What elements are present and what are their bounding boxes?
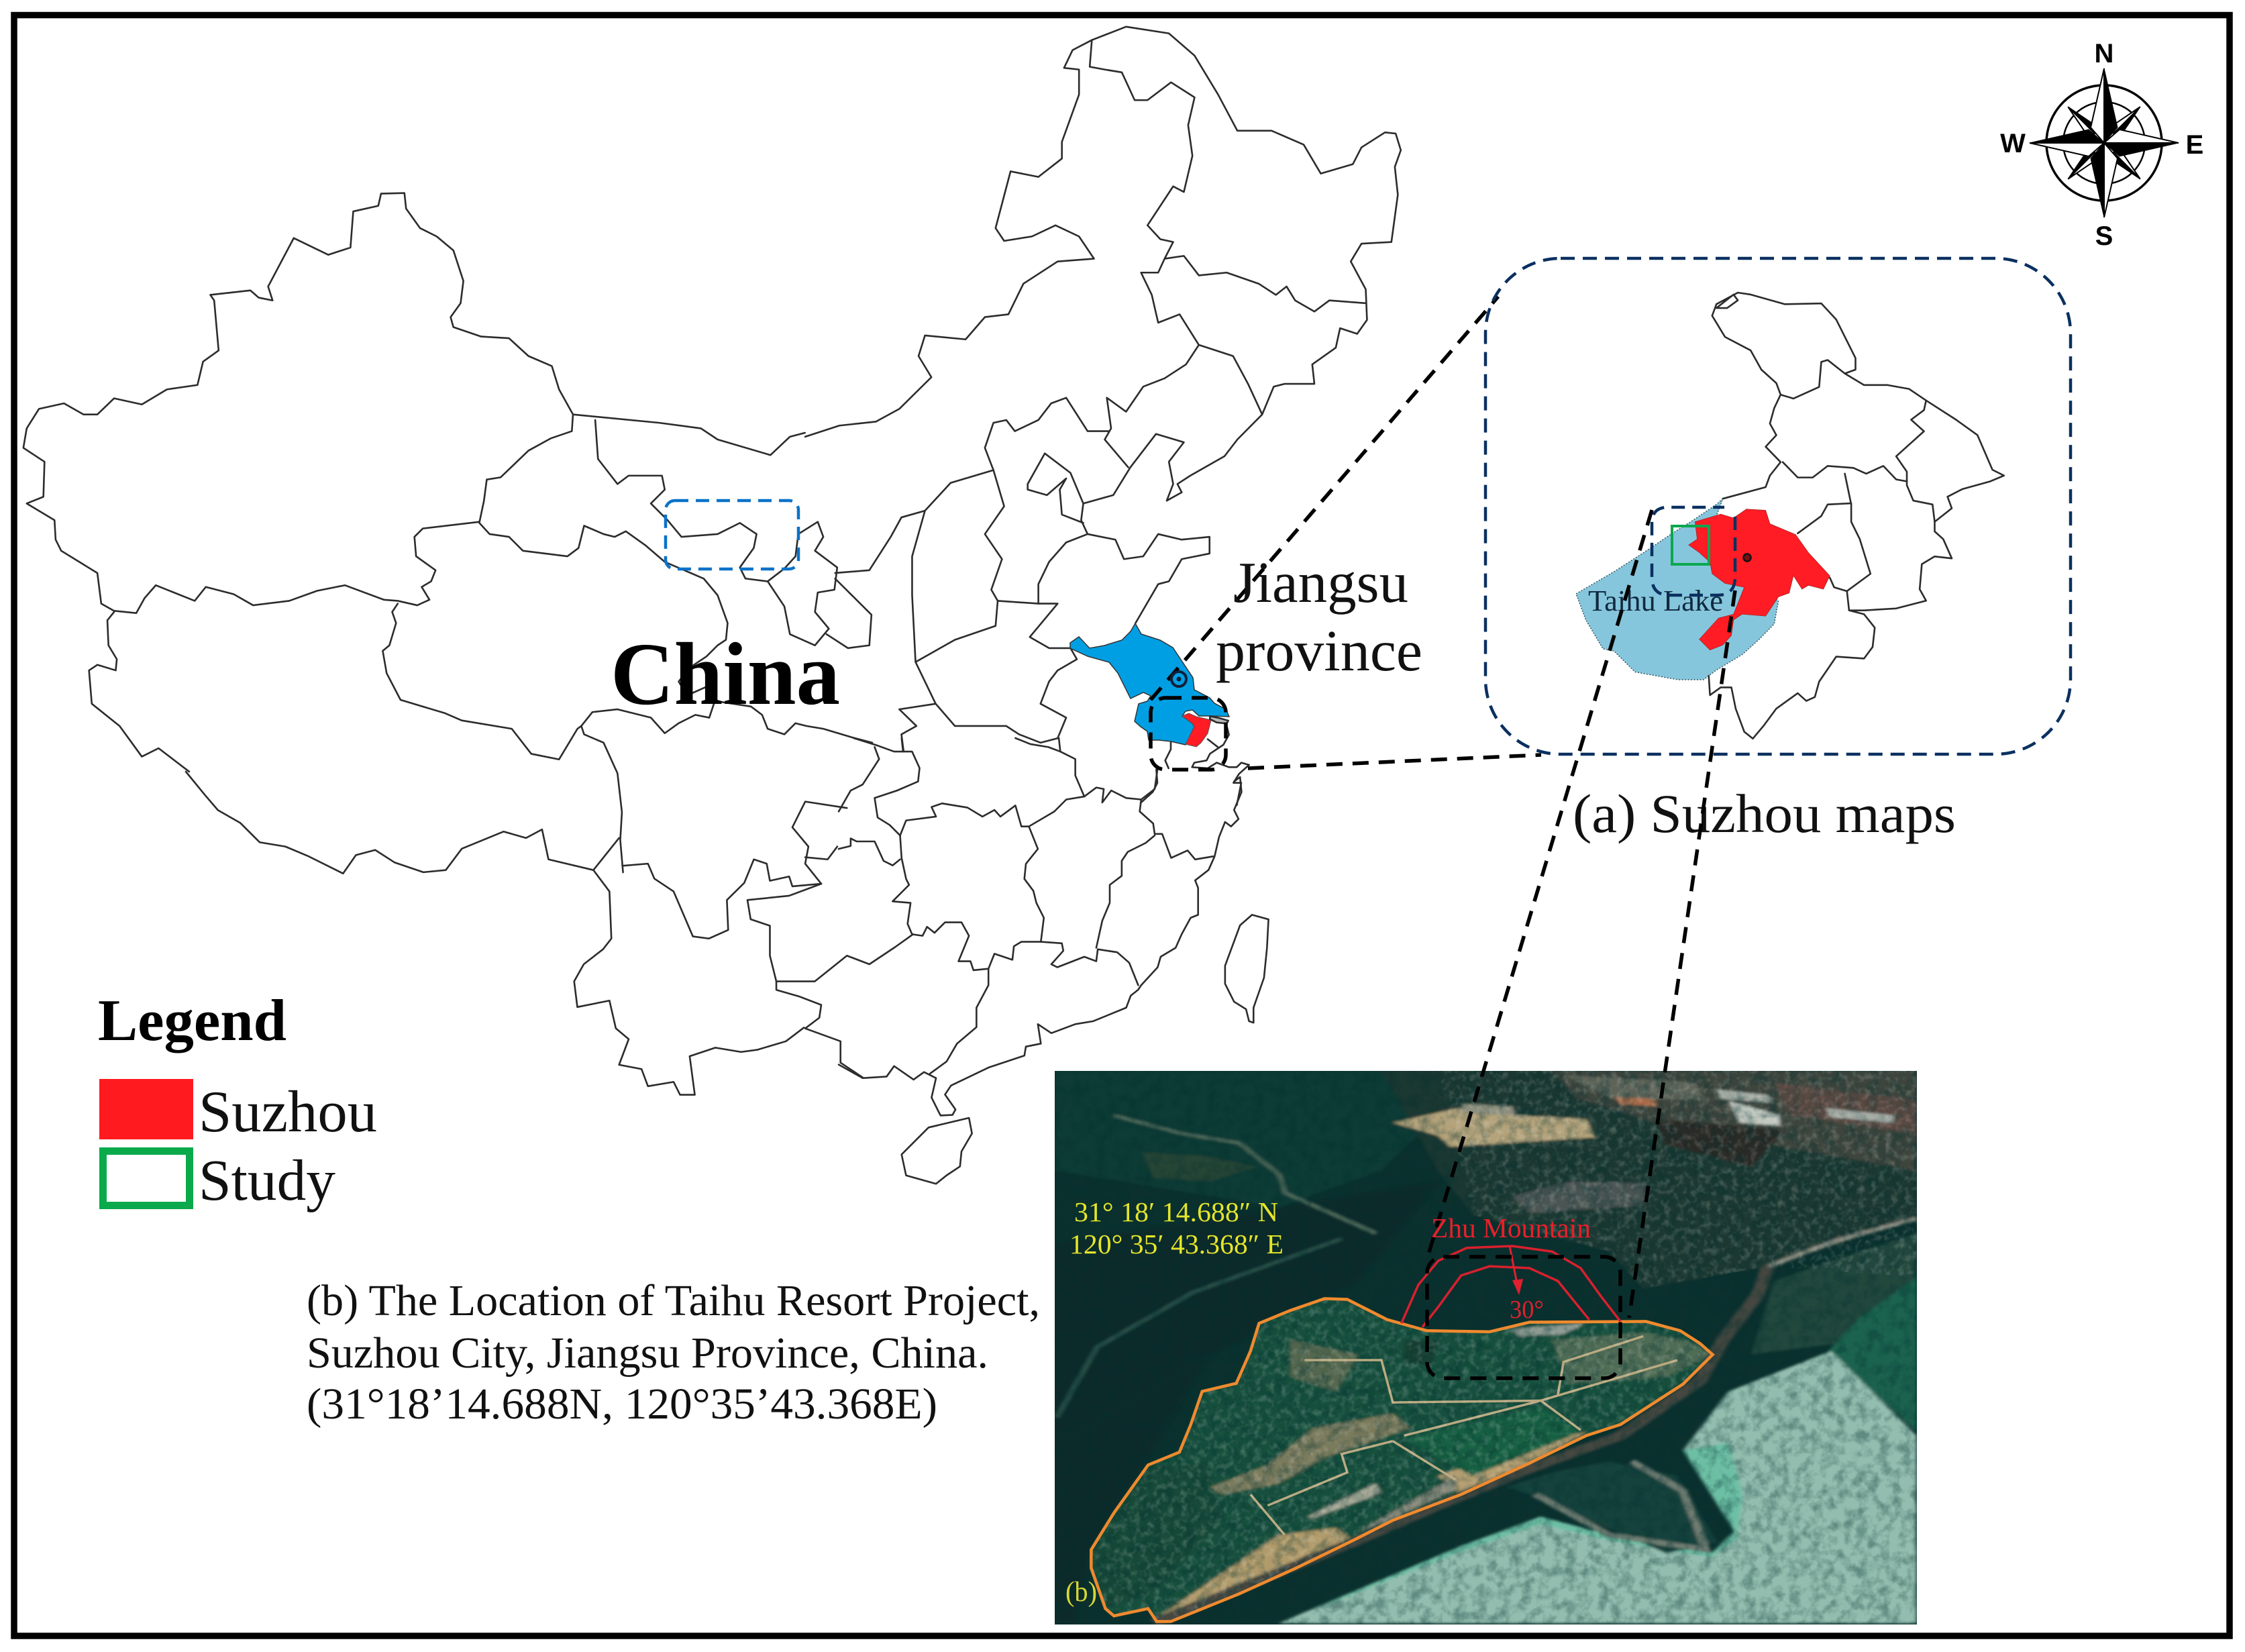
caption: (b) location of project: (31°18’14.688N, 120°35’43.368E)	[307, 1380, 937, 1429]
compass letters: W	[2000, 129, 2026, 158]
map label: Jiangsu province	[1216, 550, 1422, 683]
Jiangsu city outlines	[1709, 293, 2004, 739]
Jiangsu south border and Shanghai details	[1141, 716, 1249, 805]
compass letters: N	[2095, 39, 2113, 68]
legend label: Suzhou: Suzhou	[199, 1080, 377, 1145]
marker: Suzhou centre	[1743, 554, 1751, 561]
map label: Jiangsu province: Jiangsu	[1233, 550, 1408, 615]
legend	[98, 988, 377, 1212]
caption: (b) location of project	[307, 1276, 1040, 1429]
caption: (b) location of project: (b) The Location of Taihu Resort Project,	[307, 1276, 1040, 1325]
Suzhou highlighted in red on the China map	[1182, 713, 1211, 747]
compass letters: S	[2095, 221, 2113, 251]
inset: Suzhou maps	[1485, 258, 2071, 754]
Taihu Lake water area	[1576, 499, 1779, 680]
orange site boundary	[1091, 1298, 1713, 1621]
satellite coordinates label: 120° 35′ 43.368″ E	[1069, 1229, 1284, 1259]
map of China provinces	[23, 27, 1401, 1184]
satellite coordinates label	[1069, 1196, 1284, 1259]
slope arrow	[1510, 1246, 1523, 1295]
compass dial and star	[2030, 68, 2179, 217]
satellite base imagery painted with blurred shapes	[1054, 1070, 1916, 1623]
mottled dark texture	[1055, 1071, 1917, 1624]
map label: Jiangsu province: province	[1216, 618, 1422, 683]
compass letters	[2000, 39, 2203, 251]
satellite image panel	[1054, 1070, 1917, 1624]
long dashed leader lines from inset to satellite image	[1427, 510, 1735, 1318]
compass letters: E	[2186, 130, 2203, 160]
blue dashed box on map	[666, 501, 798, 569]
study site green square	[1672, 526, 1709, 564]
Zhu Mountain label: Zhu Mountain	[1431, 1212, 1591, 1243]
dashed leader lines from Jiangsu to inset	[1151, 297, 1541, 768]
navy rounded dashed inset frame	[1485, 258, 2071, 754]
map label: China: China	[611, 624, 840, 723]
satellite coordinates label: 31° 18′ 14.688″ N	[1074, 1196, 1278, 1227]
legend title: Legend	[98, 988, 286, 1053]
marker: Nanjing location	[1171, 672, 1186, 686]
dashed box around south Jiangsu	[1151, 698, 1226, 770]
satellite panel label (b): (b)	[1065, 1577, 1097, 1608]
Suzhou city in red	[1689, 509, 1830, 650]
legend label: Study: Study	[199, 1147, 335, 1212]
Taihu Lake label: Taihu Lake	[1588, 584, 1723, 617]
light speckle on land and town	[1055, 1071, 1917, 1624]
caption: (a) Suzhou maps: (a) Suzhou maps	[1573, 783, 1956, 844]
slope angle label: 30°	[1510, 1296, 1544, 1324]
legend swatch: Study	[103, 1151, 189, 1205]
Jiangsu province highlighted in blue	[1070, 623, 1229, 745]
Zhu Mountain contour arcs	[1402, 1246, 1620, 1327]
inner navy dashed box	[1652, 507, 1735, 595]
caption: (b) location of project: Suzhou City, Jiangsu Province, China.	[307, 1329, 988, 1378]
compass rose	[2000, 39, 2203, 251]
dashed box over satellite image	[1427, 1257, 1620, 1378]
site tracks	[1251, 1336, 1677, 1535]
legend swatch: Suzhou	[99, 1079, 193, 1139]
